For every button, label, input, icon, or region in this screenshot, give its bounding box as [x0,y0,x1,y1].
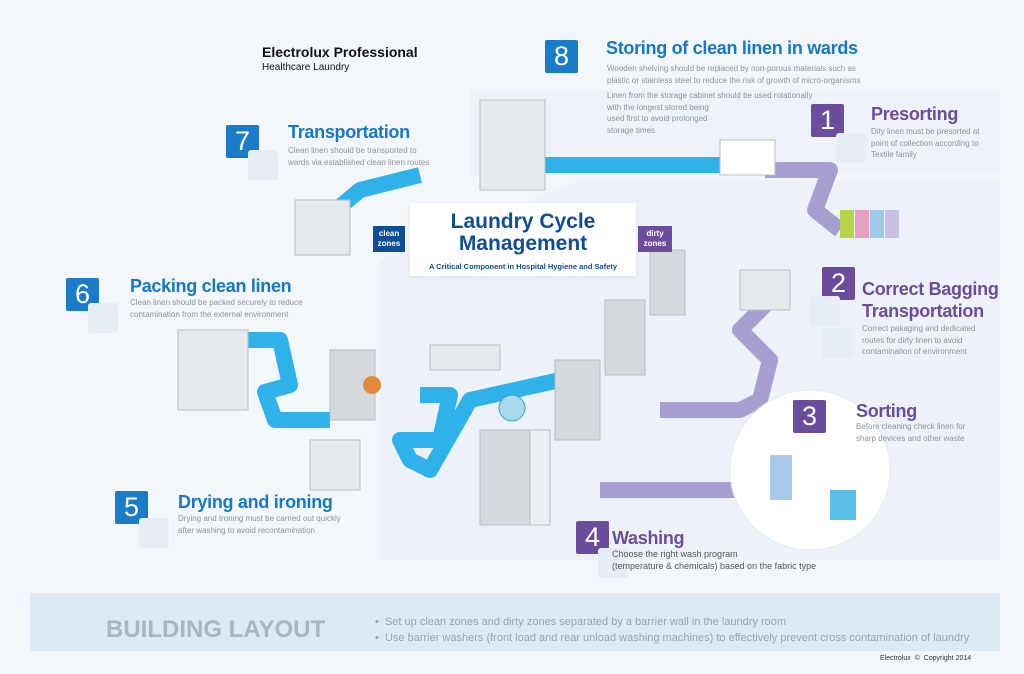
purple dirty path [600,170,840,490]
step 2: Transportation [862,301,984,321]
dirty zones tag [638,226,672,252]
step 1: Presorting [871,104,958,124]
step 8: Linen from the storage cabinet should be used rotationally [607,91,812,100]
header: Healthcare Laundry [262,62,349,73]
step 3: sharp devices and other waste [856,434,965,442]
dirty zones tag: zones [644,239,666,248]
header: Electrolux Professional [262,44,418,60]
step 1 [811,104,980,159]
step 8: plastic or stainless steel to reduce the risk of growth of micro-organisms [607,76,860,84]
step 3: Sorting [856,401,917,421]
clean zones tag: clean [379,229,399,238]
step 8: used first to avoid prolonged [607,114,708,123]
step 5: 5 [124,492,139,522]
step 7: 7 [235,126,250,156]
step 6: Packing clean linen [130,276,291,296]
step 7 [226,122,430,180]
step 8: 8 [554,41,569,71]
step 5 [115,491,341,548]
step 4: 4 [585,522,600,552]
step 1: point of collection according to [871,138,979,148]
step 7: Clean linen should be transported to [288,146,417,155]
building layout band [30,593,1000,651]
center title: Management [459,232,587,255]
machines [178,100,790,525]
step 4 [576,521,816,578]
step 8: Storing of clean linen in wards [606,38,858,58]
step 7: wards via established clean linen routes [288,158,429,166]
step 3: 3 [802,401,817,431]
step 2: Correct Bagging [862,279,999,299]
step 1: Dity linen must be presorted at [871,127,980,136]
step 2: 2 [831,268,846,298]
step 5: Drying and Ironing must be carried out quickly [178,514,341,523]
center title: Laundry Cycle [451,210,595,233]
building layout band: BUILDING LAYOUT [106,616,325,643]
step 6: Clean linen should be packed securely to reduce [130,298,303,307]
building layout band: • Set up clean zones and dirty zones separated by a barrier wall in the laundry room [375,616,786,628]
step 5: after washing to avoid recontamination [178,526,315,534]
dirty zones tag: dirty [646,229,664,238]
clean zones tag: zones [378,239,400,248]
step 8: storage times [607,126,655,134]
step 4: Washing [612,528,684,548]
step 6: contamination from the external environment [130,310,288,318]
clean zones tag [373,226,405,252]
step 1: 1 [820,105,835,135]
step 3: Before cleaning check linen for [856,422,965,431]
step 6: 6 [75,279,90,309]
header [262,44,418,73]
step 2: contamination of environment [862,347,967,356]
center title [410,203,636,276]
sorting circle [730,390,890,550]
step 2: Correct pakaging and dedicated [862,324,975,333]
copyright: Electrolux © Copyright 2014 [880,655,971,662]
step 2 [822,267,999,356]
center title: A Critical Component in Hospital Hygiene and Safety [429,262,617,271]
step 6 [66,276,303,333]
step 3 [793,400,966,442]
step 8: with the longest stored being [607,102,709,112]
blue clean path [240,165,765,470]
step 2: routes for dirty linen to avoid [862,336,962,344]
step 8 [545,38,860,134]
step 4: (temperature & chemicals) based on the fabric type [612,560,816,570]
step 5: Drying and ironing [178,492,333,512]
building layout band: • Use barrier washers (front load and rear unload washing machines) to effectively prevent cross contamination of laundry [375,632,969,644]
step 4: Choose the right wash program [612,549,738,559]
step 8: Wooden shelving should be replaced by non-porous materials such as [607,64,856,73]
step 1: Textile family [871,150,917,159]
step 7: Transportation [288,122,410,142]
